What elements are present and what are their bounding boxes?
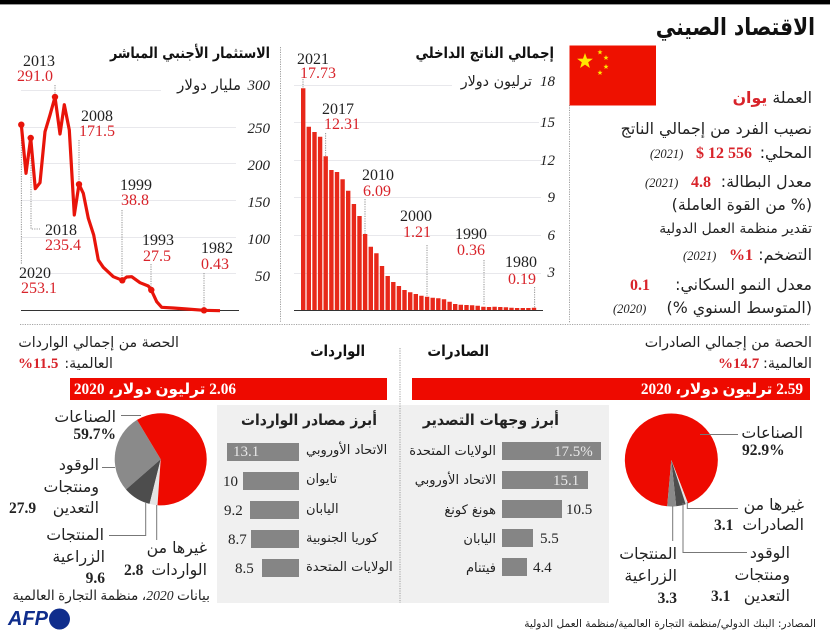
values: import sources	[223, 444, 259, 577]
data labels: GDP: 2000	[400, 208, 432, 225]
heading: imports: الواردات	[310, 343, 365, 360]
title: الاقتصاد الصيني	[656, 13, 815, 41]
pie labels: exports: 92.9%	[742, 442, 785, 459]
pie labels: exports: غيرها من	[744, 495, 804, 515]
pie labels: imports: المنتجات	[46, 525, 104, 544]
text: export world share: العالمية:	[763, 356, 812, 372]
pie labels: imports	[9, 407, 207, 587]
unemployment: (2021)	[645, 176, 678, 190]
icon: AFP logo	[7, 608, 70, 630]
text: export world share: الحصة من إجمالي الصادرات	[645, 335, 812, 351]
axis labels: FDI: مليار دولار	[176, 76, 241, 94]
text: import world share	[18, 335, 179, 372]
labels: export destinations: هونغ كونغ	[444, 503, 496, 518]
inflation	[683, 245, 812, 264]
banner: imports total	[70, 378, 387, 400]
pie labels: imports: الصناعات	[54, 407, 116, 426]
pie labels: exports: التعدين	[744, 586, 790, 606]
population growth: معدل النمو السكاني:	[675, 275, 812, 295]
bar chart: GDP	[301, 88, 536, 310]
values: export destinations: 10.5	[566, 502, 592, 518]
text: export world share	[645, 335, 812, 372]
GDP per capita: $ 12 556	[696, 145, 752, 162]
heading: GDP: إجمالي الناتج الداخلي	[416, 45, 554, 62]
heading: exports: الصادرات	[427, 343, 489, 360]
data labels: GDP: 2010	[362, 167, 394, 184]
values: export destinations	[533, 444, 593, 576]
axis labels: FDI: 50	[255, 269, 270, 285]
icon: AFP logo: AFP	[7, 608, 49, 630]
pie labels: exports: 3.3	[658, 590, 677, 607]
pie labels: imports: غيرها من	[147, 538, 207, 558]
data labels: FDI: 253.1	[21, 280, 57, 297]
axis labels: FDI: 300	[246, 78, 270, 94]
pie labels: imports: الواردات	[151, 560, 207, 580]
icon: China flag	[570, 46, 656, 106]
axis labels: GDP: 9	[548, 190, 556, 206]
currency: العملة يوان	[733, 88, 812, 107]
data labels: FDI: 38.8	[121, 192, 149, 209]
unemployment: (% من القوة العاملة)	[672, 195, 812, 215]
text: import world share: العالمية:	[64, 356, 113, 372]
data labels: GDP: 1980	[505, 254, 537, 271]
GDP per capita	[621, 119, 812, 163]
data labels: GDP: 17.73	[300, 65, 336, 82]
values: export destinations: 5.5	[540, 531, 559, 547]
pie chart: imports	[115, 413, 207, 505]
note: data source for trade: بيانات 2020، منظمة التجارة العالمية	[12, 588, 210, 604]
banner: exports total: 2.59 ترليون دولار، 2020	[641, 381, 803, 398]
panel: top export destinations	[409, 411, 601, 576]
axis labels: GDP: 12	[540, 153, 556, 169]
inflation: (2021)	[683, 249, 716, 263]
heading: export destinations: أبرز وجهات التصدير	[422, 411, 559, 429]
inflation: %1	[729, 247, 753, 264]
labels: import sources: اليابان	[306, 502, 339, 517]
values: export destinations: 15.1	[553, 473, 579, 489]
data labels: FDI: 1999	[120, 177, 152, 194]
data labels: GDP: 1990	[455, 226, 487, 243]
data labels: FDI: 2008	[81, 108, 113, 125]
line chart: FDI	[18, 94, 220, 313]
text: import world share: %11.5	[18, 356, 58, 372]
banner: exports total	[412, 378, 810, 400]
pie labels: exports: المنتجات	[619, 544, 677, 563]
pie labels: imports: 9.6	[86, 570, 105, 587]
population growth: 0.1	[630, 277, 650, 294]
pie labels: imports: الوقود	[59, 455, 99, 475]
data labels: FDI: 2020	[19, 265, 51, 282]
unemployment: تقدير منظمة العمل الدولية	[659, 221, 812, 237]
data labels: GDP: 2017	[322, 101, 354, 118]
unemployment: 4.8	[691, 174, 711, 191]
data labels: GDP: 12.31	[324, 116, 360, 133]
pie labels: imports: 2.8	[124, 562, 144, 579]
axis labels: FDI: 200	[248, 158, 270, 174]
bars: export destinations	[502, 442, 601, 576]
data labels: FDI: 27.5	[143, 248, 171, 265]
values: import sources: 8.5	[235, 561, 254, 577]
pie labels: imports: 27.9	[9, 500, 36, 517]
labels: export destinations	[409, 444, 496, 576]
text: import world share: الحصة من إجمالي الواردات	[18, 335, 179, 351]
labels: export destinations: اليابان	[463, 532, 496, 547]
labels: import sources: كوريا الجنوبية	[306, 531, 379, 546]
axis labels: FDI: 100	[248, 232, 270, 248]
labels: import sources: الولايات المتحدة	[306, 560, 393, 575]
axis labels: GDP: 15	[540, 115, 556, 131]
banner: imports total: 2.06 ترليون دولار، 2020	[74, 381, 236, 398]
pie labels: exports: الصناعات	[741, 423, 803, 442]
axis labels: GDP: 3	[546, 265, 555, 281]
labels: import sources: الاتحاد الأوروبي	[306, 441, 387, 458]
data labels: GDP: 0.36	[457, 242, 485, 259]
panel: trade partners background	[217, 405, 609, 603]
axis labels: GDP: 18	[540, 74, 556, 90]
data labels: GDP: 2021	[297, 51, 329, 68]
population growth: (المتوسط السنوي %)	[667, 298, 812, 318]
pie chart: exports	[625, 413, 718, 506]
axis labels: GDP: ترليون دولار	[460, 74, 532, 90]
panel: top import sources	[223, 410, 393, 577]
axis labels: FDI: 250	[248, 121, 270, 137]
panel: FDI chart	[17, 44, 270, 313]
GDP per capita: (2021)	[650, 147, 683, 161]
data labels: GDP: 1.21	[403, 224, 431, 241]
bars: import sources	[227, 443, 299, 577]
population growth	[613, 275, 812, 318]
pie labels: exports: الصادرات	[742, 515, 804, 535]
data labels: FDI: 235.4	[45, 237, 81, 254]
data labels: FDI: 291.0	[17, 68, 53, 85]
GDP per capita: نصيب الفرد من إجمالي الناتج	[621, 119, 812, 139]
heading: FDI: الاستثمار الأجنبي المباشر	[109, 44, 270, 62]
data labels: FDI: 1982	[201, 240, 233, 257]
data labels: FDI	[17, 53, 233, 297]
panel: key facts	[613, 88, 812, 318]
data labels: FDI: 2013	[23, 53, 55, 70]
pie labels: exports: الوقود	[750, 543, 790, 563]
axis labels: FDI	[176, 76, 270, 285]
values: import sources: 13.1	[233, 444, 259, 460]
labels: export destinations: فيتنام	[466, 561, 496, 576]
unemployment	[645, 172, 812, 237]
values: import sources: 9.2	[224, 503, 243, 519]
pie labels: imports: ومنتجات	[43, 477, 99, 497]
pie labels: exports: 3.1	[711, 588, 730, 605]
data labels: FDI: 0.43	[201, 256, 229, 273]
panel: GDP chart	[294, 45, 556, 311]
GDP per capita: المحلي:	[760, 143, 812, 163]
values: export destinations: 17.5%	[554, 444, 593, 460]
pie labels: exports: الزراعية	[624, 566, 677, 586]
pie labels: imports: 59.7%	[73, 426, 116, 443]
data labels: FDI: 1993	[142, 232, 174, 249]
footer: sources: المصادر: البنك الدولي/منظمة التجارة العالمية/منظمة العمل الدولية	[524, 618, 816, 630]
data labels: FDI: 2018	[45, 222, 77, 239]
labels: import sources: تايوان	[306, 472, 337, 487]
values: export destinations: 4.4	[533, 560, 552, 576]
values: import sources: 8.7	[228, 532, 247, 548]
heading: import sources: أبرز مصادر الواردات	[241, 410, 377, 429]
labels: export destinations: الولايات المتحدة	[409, 444, 496, 459]
axis labels: FDI: 150	[248, 195, 270, 211]
data labels: GDP	[297, 51, 537, 288]
data labels: GDP: 0.19	[508, 271, 536, 288]
pie labels: exports: 3.1	[714, 517, 733, 534]
unemployment: معدل البطالة:	[721, 172, 812, 191]
pie labels: exports: ومنتجات	[734, 565, 790, 585]
inflation: التضخم:	[758, 245, 812, 264]
labels: export destinations: الاتحاد الأوروبي	[415, 471, 496, 488]
axis labels: GDP	[460, 74, 556, 281]
values: import sources: 10	[223, 474, 238, 490]
pie labels: imports: الزراعية	[52, 547, 105, 567]
pie labels: imports: التعدين	[53, 498, 99, 518]
labels: import sources	[306, 441, 393, 575]
data labels: FDI: 171.5	[79, 123, 115, 140]
pie labels: exports	[619, 423, 804, 607]
axis labels: GDP: 6	[548, 228, 556, 244]
population growth: (2020)	[613, 302, 646, 316]
text: export world share: %14.7	[718, 356, 760, 372]
data labels: GDP: 6.09	[363, 183, 391, 200]
